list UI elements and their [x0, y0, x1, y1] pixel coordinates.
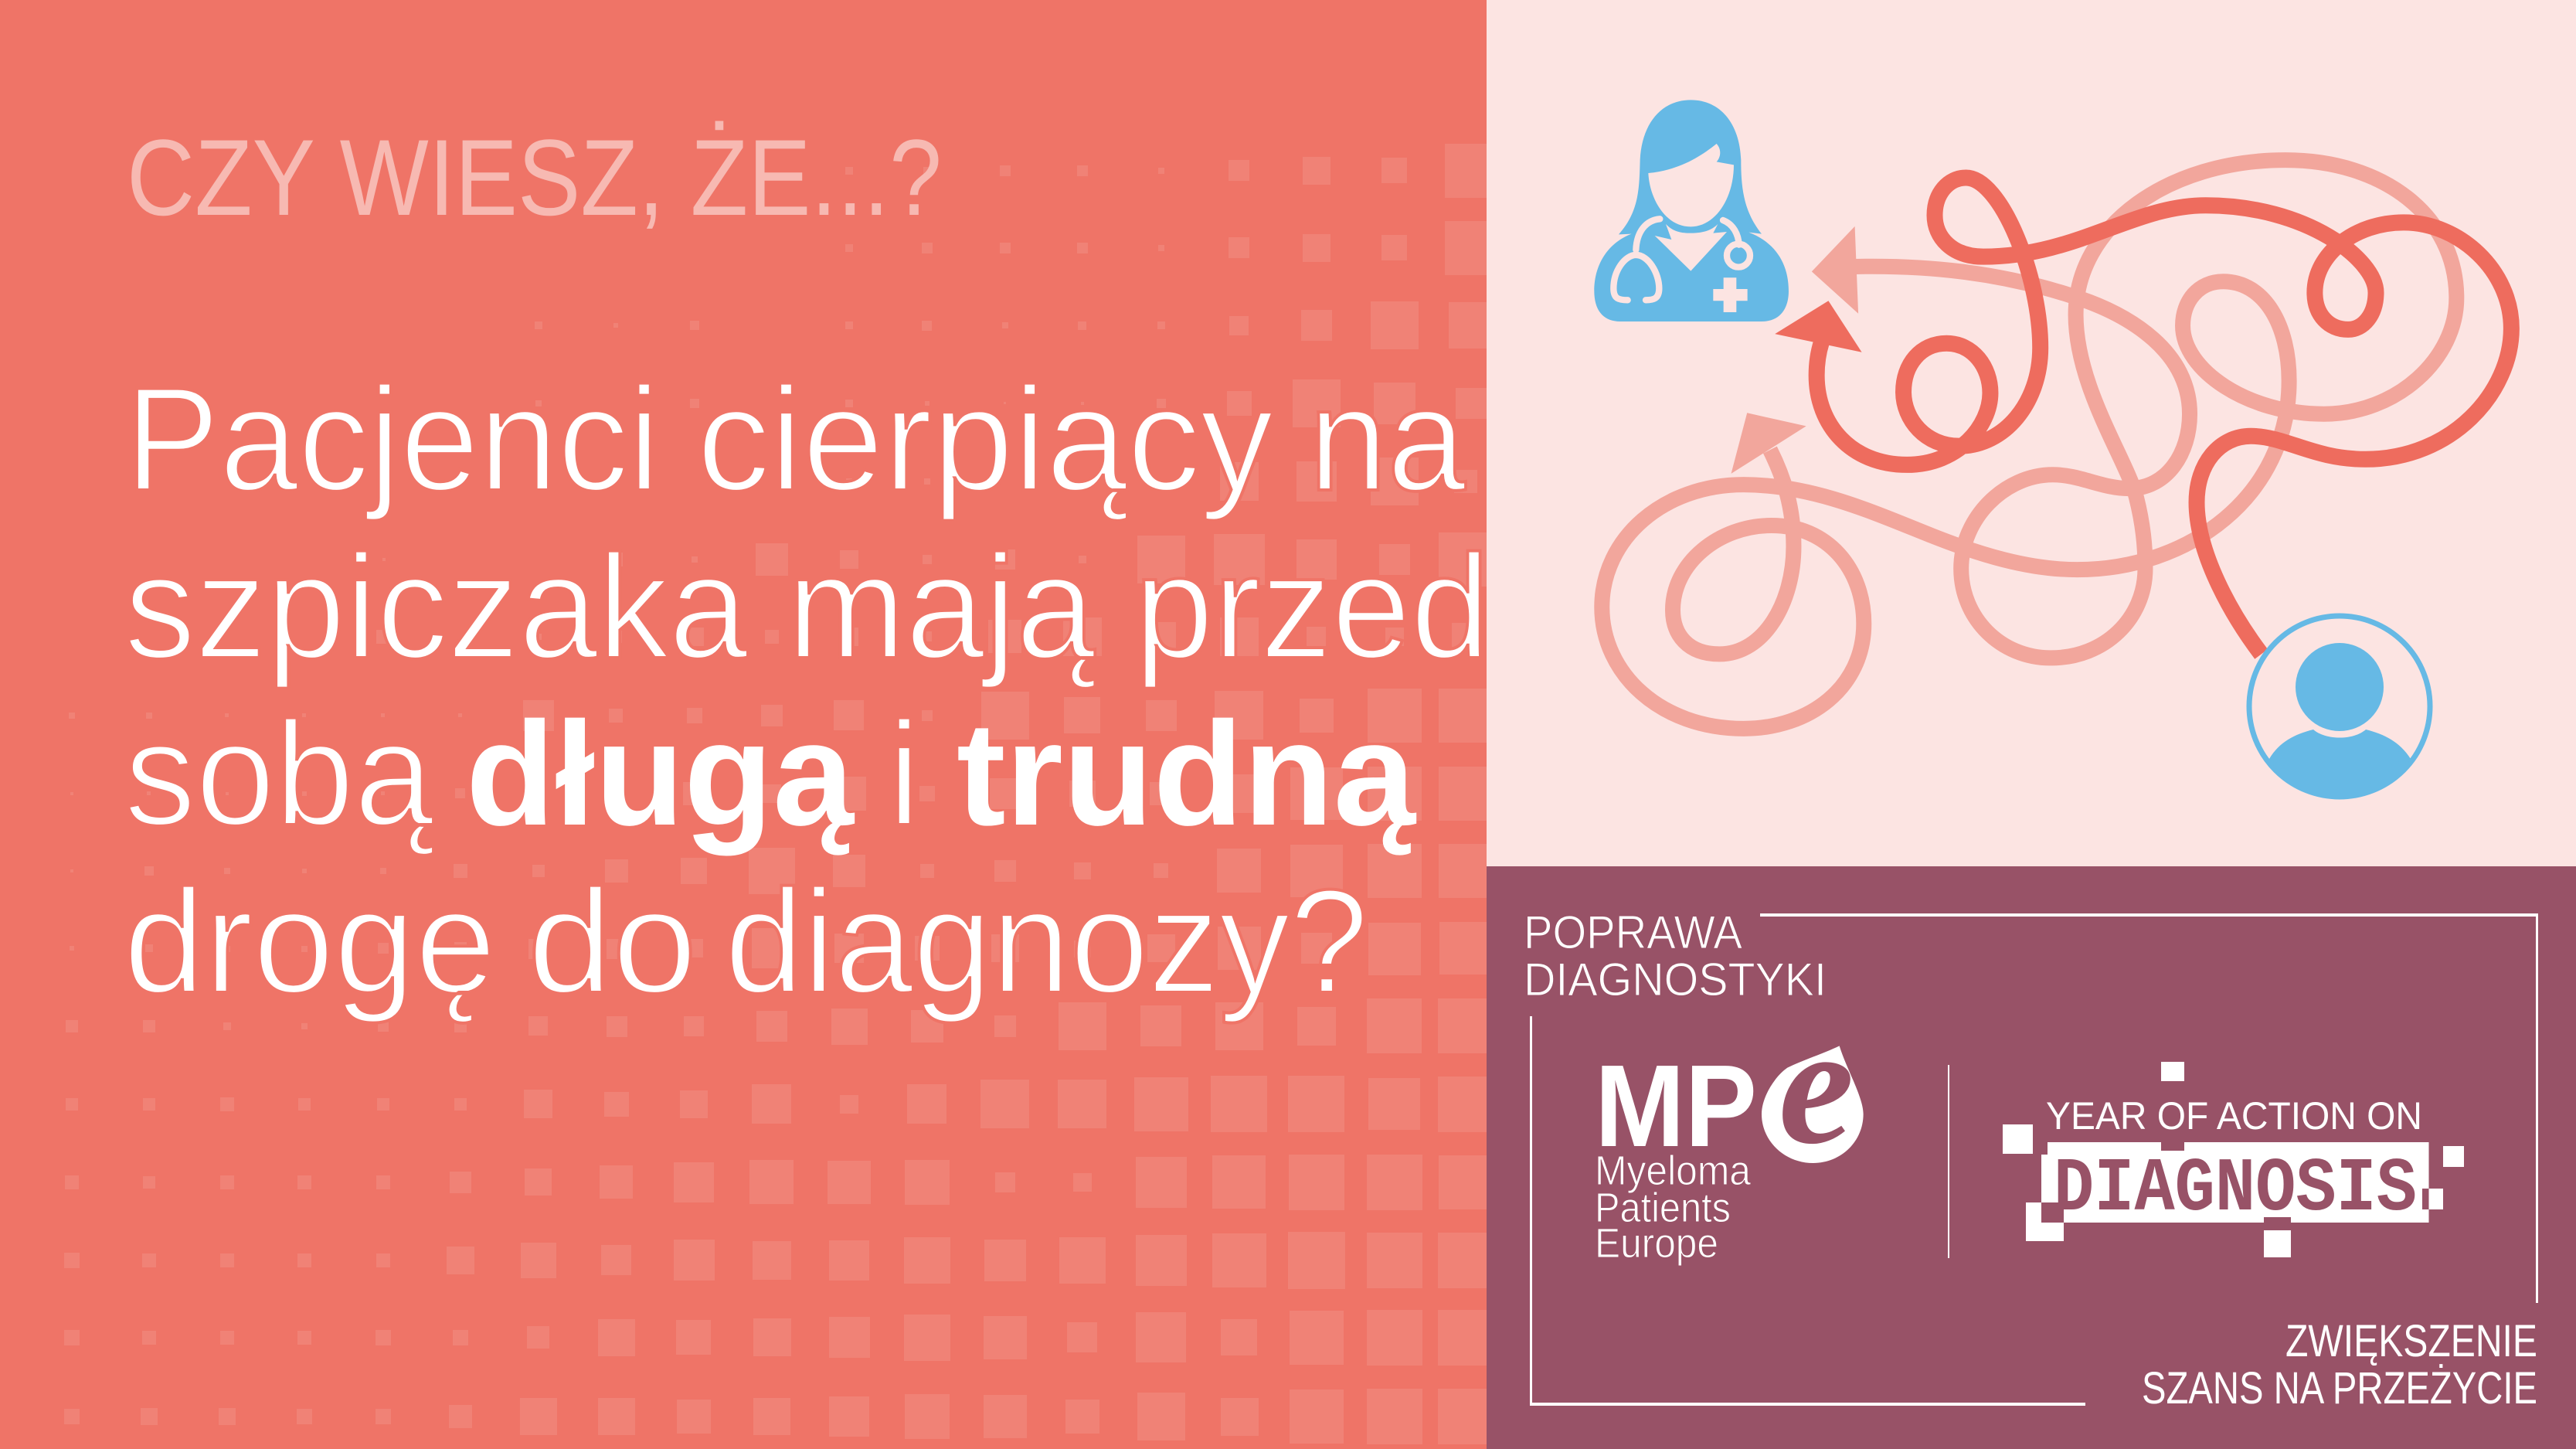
logo: Year of Action on Diagnosis: DIAGNOSIS	[2054, 1147, 2417, 1233]
logo: Year of Action on Diagnosis	[2003, 1062, 2464, 1257]
red winding path	[1816, 178, 2511, 654]
icon: doctor	[1594, 100, 1789, 321]
main heading: cierpiący	[697, 357, 1273, 522]
main heading: szpiczaka mają przed	[124, 525, 1490, 689]
main heading: sobą	[124, 692, 434, 856]
main heading: trudną	[957, 692, 1417, 856]
main heading: diagnozy?	[725, 859, 1368, 1024]
arrow head: pale upper	[1812, 226, 1858, 314]
main heading: długą	[466, 692, 855, 856]
main heading: drogę	[124, 859, 496, 1024]
arrow head: red	[1775, 301, 1862, 352]
icon: patient	[2249, 616, 2430, 798]
panel: left coral background with square pattern	[0, 0, 1499, 1449]
main heading: i	[888, 692, 920, 856]
frame lines	[1530, 913, 2538, 1406]
main heading: do	[528, 859, 697, 1024]
icon: drop with e: e	[1779, 991, 1854, 1179]
divider between logos	[1948, 1065, 1949, 1258]
logo: Myeloma Patients Europe: Myeloma	[1595, 1148, 1752, 1194]
main heading: Pacjenci	[125, 357, 660, 522]
logo: Year of Action on Diagnosis: YEAR OF ACTION ON	[2046, 1094, 2422, 1138]
panel: pale pink illustration	[1487, 0, 2576, 866]
label: POPRAWA DIAGNOSTYKI: POPRAWA	[1524, 906, 1742, 958]
main heading	[124, 357, 1490, 1024]
winding diagnosis paths with arrows	[1594, 152, 2520, 736]
pale winding path	[1602, 160, 2456, 729]
panel: mauve logo section	[1487, 866, 2576, 1449]
logo: Myeloma Patients Europe: Patients	[1595, 1185, 1731, 1231]
arrow head: pale lower	[1731, 413, 1806, 474]
logo: Myeloma Patients Europe: Europe	[1595, 1220, 1718, 1267]
main heading: na	[1309, 357, 1466, 522]
logo: Myeloma Patients Europe	[1595, 991, 1864, 1267]
label: POPRAWA DIAGNOSTYKI: DIAGNOSTYKI	[1524, 954, 1827, 1005]
label: ZWIĘKSZENIE SZANS NA PRZEŻYCIE	[2142, 1316, 2537, 1413]
logo: Myeloma Patients Europe: MP	[1595, 1040, 1757, 1171]
label: POPRAWA DIAGNOSTYKI	[1524, 906, 1827, 1005]
eyebrow heading: CZY WIESZ, ŻE...?: CZY WIESZ, ŻE...?	[127, 117, 942, 238]
